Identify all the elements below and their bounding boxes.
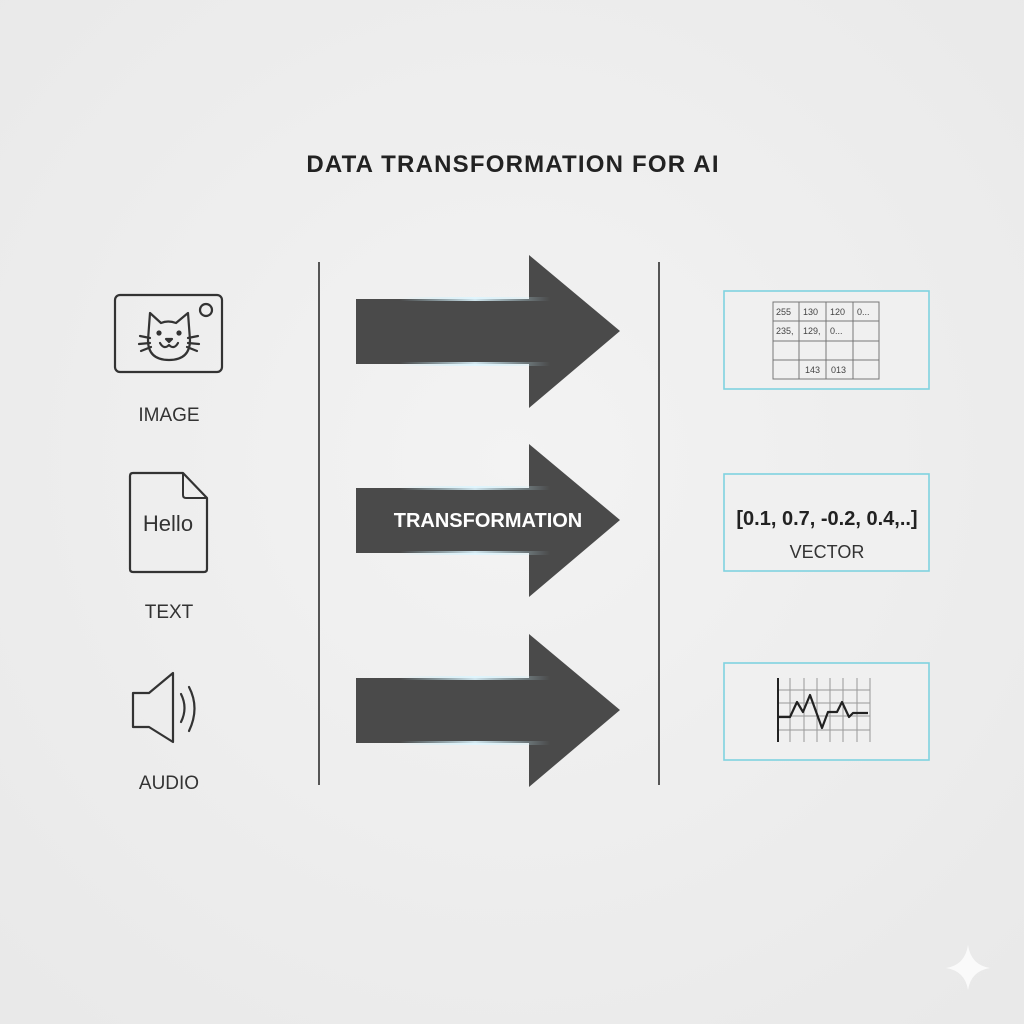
label: image: IMAGE <box>138 405 200 426</box>
label: audio: AUDIO <box>139 773 199 794</box>
title: DATA TRANSFORMATION FOR AI <box>306 151 720 178</box>
output box: vector <box>724 474 929 571</box>
output box: pixel matrix: 013 <box>831 365 846 375</box>
output box: pixel matrix: 235, <box>776 326 794 336</box>
output box: waveform <box>724 663 929 760</box>
icon: image with cat <box>115 295 222 372</box>
output box: pixel matrix: 255 <box>776 307 791 317</box>
arrow 2 with label: TRANSFORMATION <box>394 510 582 532</box>
label: text: TEXT <box>145 602 194 623</box>
icon: text document: Hello <box>143 511 193 536</box>
divider left <box>318 262 320 785</box>
icon: text document <box>130 473 207 572</box>
output box: pixel matrix: 143 <box>805 365 820 375</box>
output box: pixel matrix <box>724 291 929 389</box>
divider right <box>658 262 660 785</box>
arrow 2 with label <box>356 444 620 597</box>
output box: pixel matrix: 0... <box>857 307 870 317</box>
output box: vector: [0.1, 0.7, -0.2, 0.4,..] <box>736 508 918 530</box>
icon: speaker <box>133 673 194 742</box>
output box: pixel matrix: 129, <box>803 326 821 336</box>
output box: pixel matrix: 120 <box>830 307 845 317</box>
output box: vector: VECTOR <box>790 542 864 562</box>
arrow 3 <box>356 634 620 787</box>
output box: pixel matrix: 130 <box>803 307 818 317</box>
arrow 1 <box>356 255 620 408</box>
output box: pixel matrix: 0... <box>830 326 843 336</box>
icon: sparkle <box>946 945 990 990</box>
